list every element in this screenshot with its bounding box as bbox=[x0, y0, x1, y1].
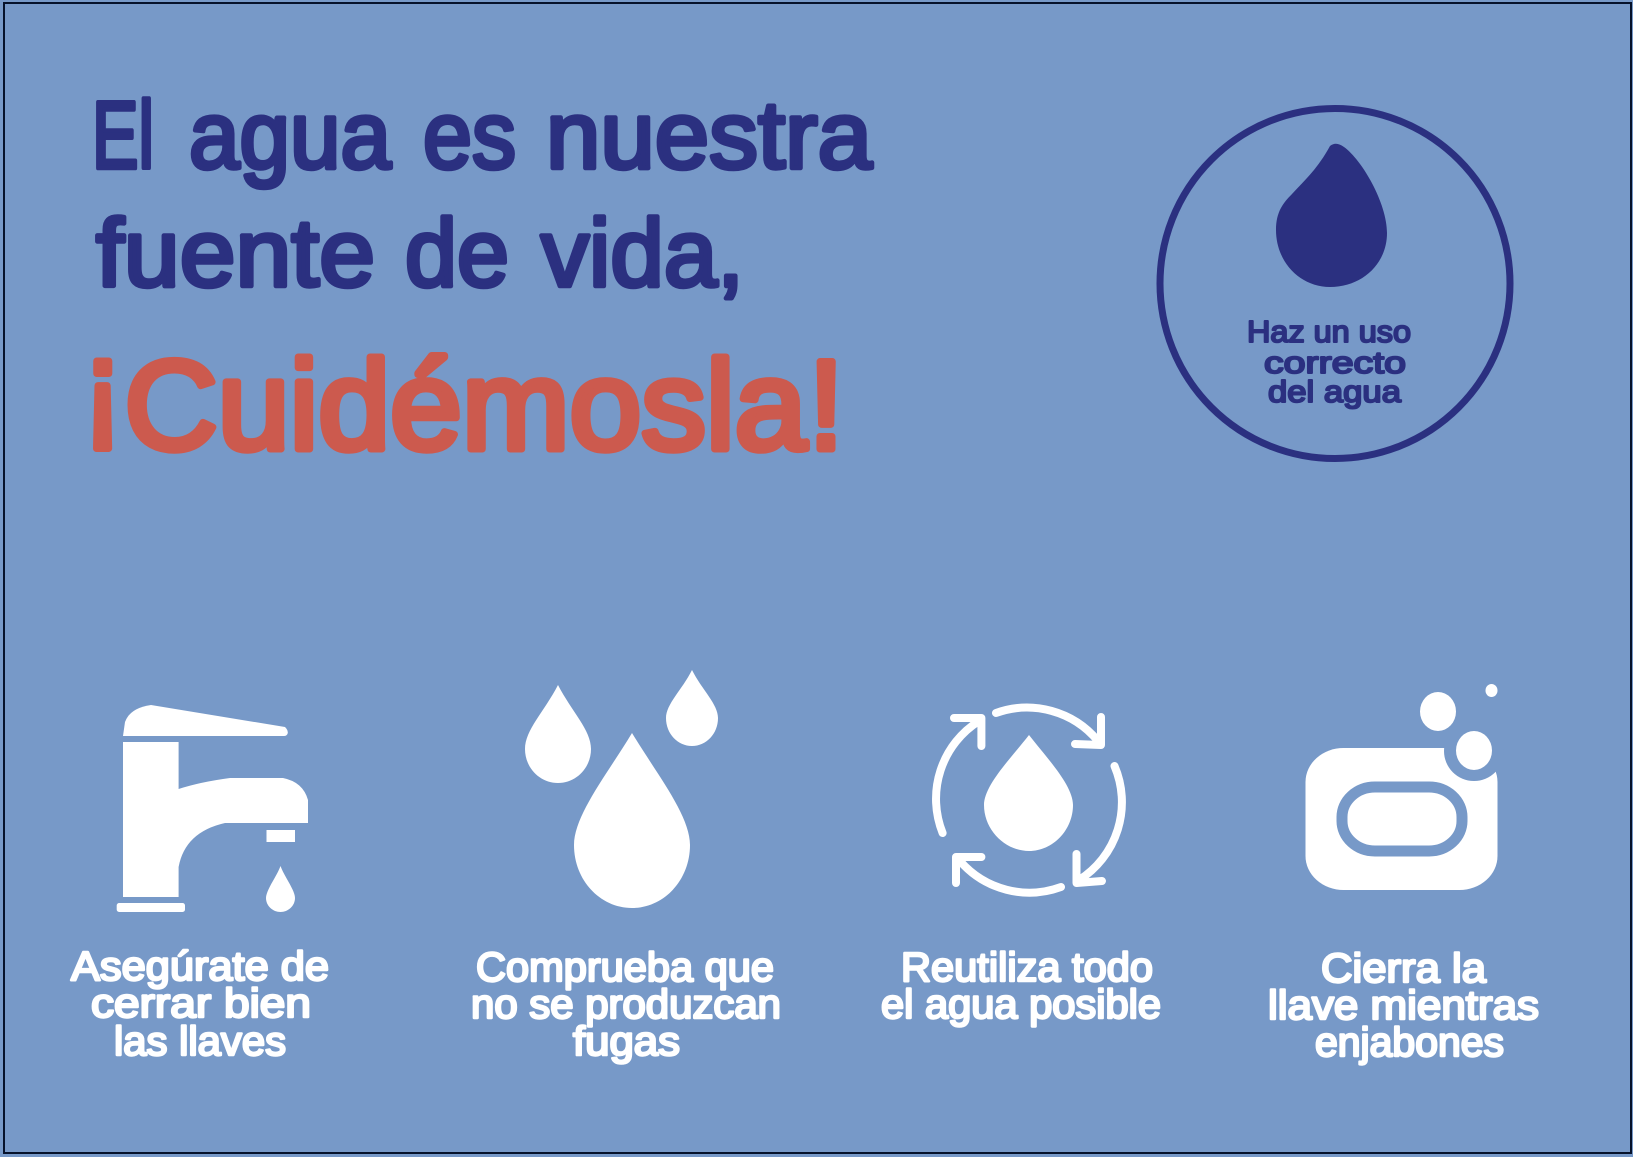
caption: enjabones bbox=[1315, 1019, 1504, 1065]
title: nuestra bbox=[546, 82, 873, 189]
panel: reutilizar bbox=[881, 708, 1161, 1027]
badge: uso correcto del agua bbox=[1160, 108, 1510, 458]
icon: recycling arrows around drop bbox=[936, 708, 1122, 893]
caption: el agua posible bbox=[881, 981, 1161, 1027]
title: agua bbox=[189, 82, 392, 189]
caption: cerrar bien bbox=[91, 980, 311, 1026]
headline: Cuidémosla: Cuidémosla bbox=[124, 334, 807, 476]
caption: Cierra la bbox=[1321, 945, 1486, 991]
caption: Reutiliza todo bbox=[901, 944, 1153, 990]
panel: fugas bbox=[471, 670, 781, 1064]
caption: Comprueba que bbox=[476, 944, 774, 990]
title: vida, bbox=[541, 200, 744, 307]
caption: las llaves bbox=[114, 1018, 286, 1064]
headline: Cuidémosla: ! bbox=[808, 334, 844, 476]
icon: faucet bbox=[117, 705, 308, 912]
title bbox=[92, 82, 873, 307]
title: de bbox=[405, 200, 509, 307]
caption bbox=[71, 943, 329, 1064]
title: fuente bbox=[96, 200, 375, 307]
icon: water drop bbox=[1276, 144, 1387, 287]
icon: three water drops bbox=[525, 670, 718, 908]
panel: cerrar las llaves bbox=[71, 705, 329, 1064]
panel: jabón bbox=[1268, 684, 1539, 1065]
title: El bbox=[92, 82, 154, 189]
caption: Asegúrate de bbox=[71, 943, 329, 989]
badge text: Haz un uso bbox=[1247, 314, 1411, 349]
icon: soap bar with bubbles bbox=[1306, 684, 1515, 890]
caption bbox=[1268, 945, 1539, 1065]
caption: llave mientras bbox=[1268, 982, 1539, 1028]
caption bbox=[881, 944, 1161, 1027]
caption: no se produzcan bbox=[471, 981, 781, 1027]
badge text bbox=[1247, 314, 1411, 409]
badge text: correcto bbox=[1264, 345, 1406, 380]
caption bbox=[471, 944, 781, 1064]
caption: fugas bbox=[573, 1018, 680, 1064]
headline: Cuidémosla: ¡ bbox=[82, 313, 124, 455]
badge text: del agua bbox=[1268, 374, 1402, 409]
title: es bbox=[423, 82, 516, 189]
